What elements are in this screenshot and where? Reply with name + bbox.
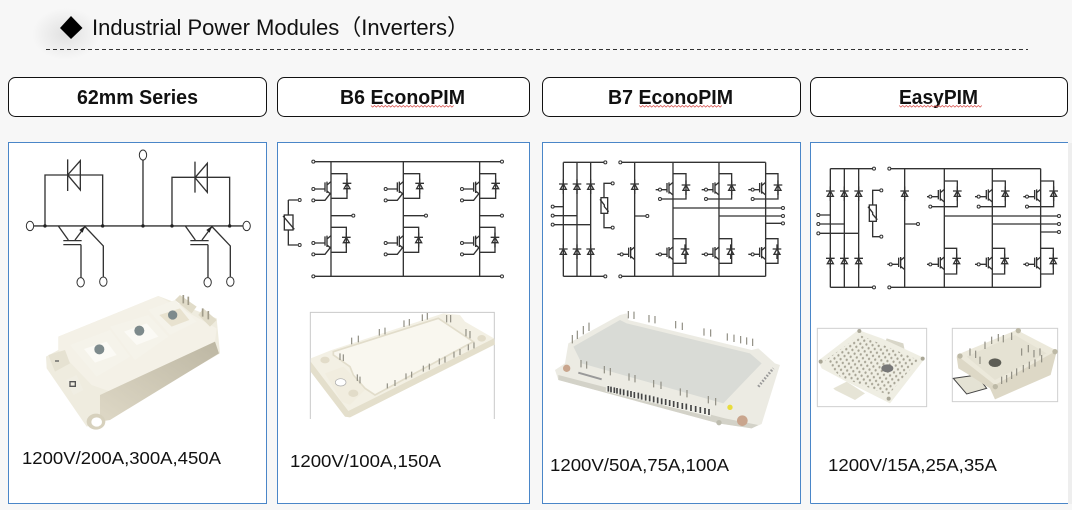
circuit: PIM with rectifier, brake and inverter bbox=[551, 161, 784, 278]
panel: EasyPIM bbox=[810, 142, 1072, 504]
heading: 62mm Series: 62mm Series bbox=[77, 87, 198, 109]
heading: B7 EconoPIM bbox=[542, 78, 800, 116]
panel: B6 EconoPIM bbox=[278, 142, 530, 504]
spec label: 1200V/100A,150A bbox=[290, 451, 441, 471]
heading: 62mm Series bbox=[8, 78, 266, 116]
title: Industrial Power Modules（Inverters） bbox=[92, 15, 469, 40]
image: EasyPIM module, angled view bbox=[952, 328, 1058, 402]
heading: EasyPIM: EasyPIM bbox=[899, 87, 978, 109]
spec label: 1200V/15A,25A,35A bbox=[828, 455, 997, 475]
heading: B6 EconoPIM: B6 EconoPIM bbox=[340, 87, 465, 109]
spec label: 1200V/50A,75A,100A bbox=[550, 455, 729, 475]
spec label: 1200V/200A,300A,450A bbox=[22, 448, 221, 468]
image: B6 EconoPIM module bbox=[310, 312, 495, 419]
panel right side tint bbox=[1068, 143, 1072, 504]
title divider bbox=[46, 48, 1028, 50]
panel: B7 EconoPIM bbox=[542, 142, 800, 504]
heading: B6 EconoPIM bbox=[278, 78, 530, 116]
heading: EasyPIM bbox=[810, 78, 1068, 116]
panel: 62mm Series bbox=[8, 142, 266, 504]
image: 62mm module bbox=[46, 295, 220, 430]
title bbox=[32, 8, 469, 60]
image: EasyPIM module, top view bbox=[817, 328, 927, 407]
circuit: EasyPIM bbox=[817, 167, 1060, 289]
heading: B7 EconoPIM: B7 EconoPIM bbox=[608, 87, 733, 109]
icon: diamond bullet bbox=[60, 16, 82, 39]
circuit: half bridge bbox=[26, 150, 250, 287]
image: B7 EconoPIM module bbox=[555, 311, 780, 428]
circuit: six-pack inverter bbox=[283, 160, 503, 278]
